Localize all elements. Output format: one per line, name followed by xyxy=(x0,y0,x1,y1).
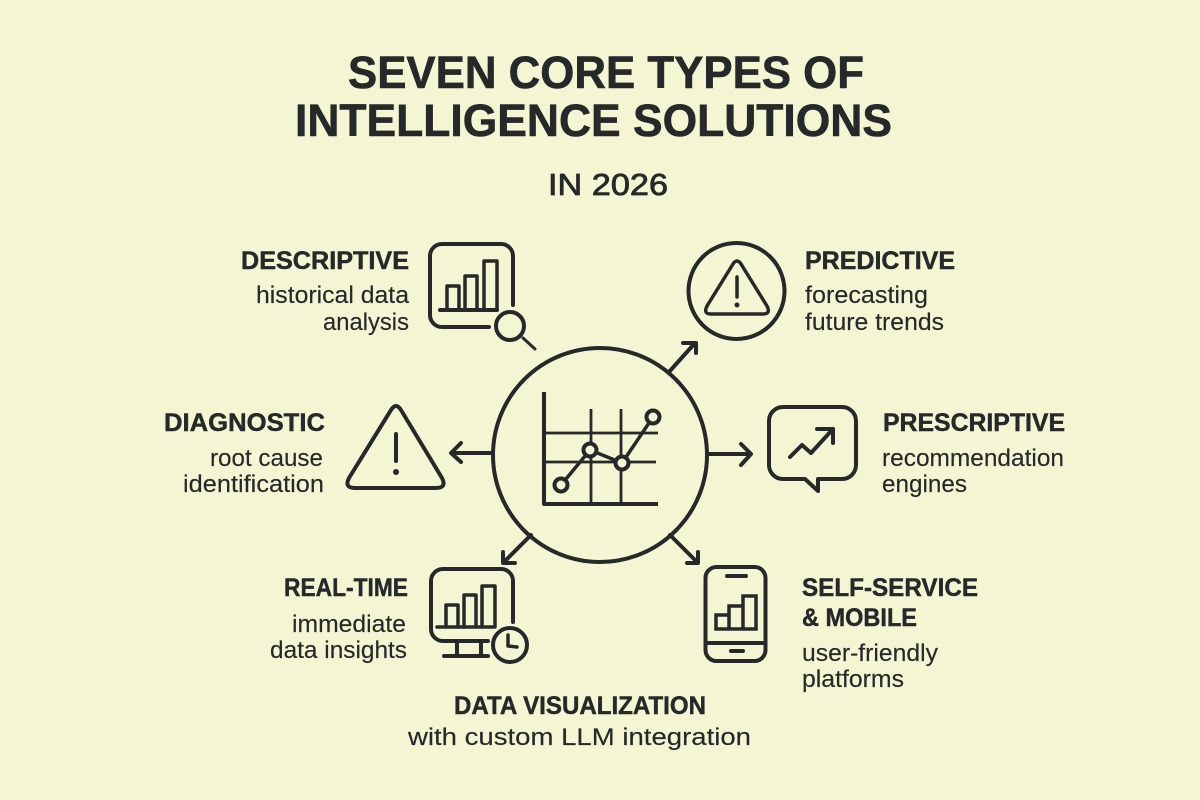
label: predictive xyxy=(805,247,955,336)
label: self-service and mobile: platforms xyxy=(802,666,904,693)
label: data visualization: with custom LLM integration xyxy=(407,724,751,751)
subtitle: IN 2026 xyxy=(548,167,668,202)
label: prescriptive: PRESCRIPTIVE xyxy=(883,409,1065,437)
label: real-time xyxy=(270,574,408,664)
arrow: to real-time xyxy=(503,535,531,563)
label: self-service and mobile: & MOBILE xyxy=(802,604,917,632)
title xyxy=(295,47,892,146)
label: descriptive: historical data xyxy=(256,282,409,309)
label: prescriptive: engines xyxy=(882,471,967,498)
label: diagnostic: root cause xyxy=(210,445,323,472)
icon: self-service smartphone xyxy=(706,567,766,661)
label: descriptive: DESCRIPTIVE xyxy=(241,247,409,275)
arrow: to diagnostic xyxy=(451,443,493,462)
label: self-service and mobile: SELF-SERVICE xyxy=(802,574,978,602)
label: real-time: REAL-TIME xyxy=(284,574,408,602)
label: diagnostic: identification xyxy=(183,471,324,498)
label: data visualization: DATA VISUALIZATION xyxy=(454,692,706,720)
label: prescriptive: recommendation xyxy=(882,445,1064,472)
label: self-service and mobile xyxy=(802,574,978,693)
label: descriptive xyxy=(241,247,409,336)
title: INTELLIGENCE SOLUTIONS xyxy=(295,95,892,146)
label: diagnostic: DIAGNOSTIC xyxy=(164,409,325,437)
icon: predictive warning in circle xyxy=(688,243,784,339)
label: real-time: immediate xyxy=(292,611,406,638)
label: self-service and mobile: user-friendly xyxy=(802,640,939,667)
arrow: to predictive xyxy=(669,343,696,372)
central circle with line chart xyxy=(493,348,707,562)
label: prescriptive xyxy=(882,409,1065,498)
label: descriptive: analysis xyxy=(323,309,409,336)
label: predictive: PREDICTIVE xyxy=(805,247,955,275)
label: data visualization xyxy=(407,692,751,751)
arrow: to prescriptive xyxy=(707,444,751,465)
icon: real-time monitor with clock xyxy=(431,569,527,662)
label: diagnostic xyxy=(164,409,325,498)
icon: diagnostic warning triangle xyxy=(347,406,444,488)
label: predictive: forecasting xyxy=(805,282,928,309)
label: real-time: data insights xyxy=(270,637,407,664)
label: predictive: future trends xyxy=(805,309,944,336)
icon: prescriptive speech bubble with trend xyxy=(769,407,856,491)
icon: descriptive bar chart with magnifier xyxy=(430,244,535,349)
arrow: to self-service and mobile xyxy=(670,535,698,563)
title: SEVEN CORE TYPES OF xyxy=(348,47,864,98)
